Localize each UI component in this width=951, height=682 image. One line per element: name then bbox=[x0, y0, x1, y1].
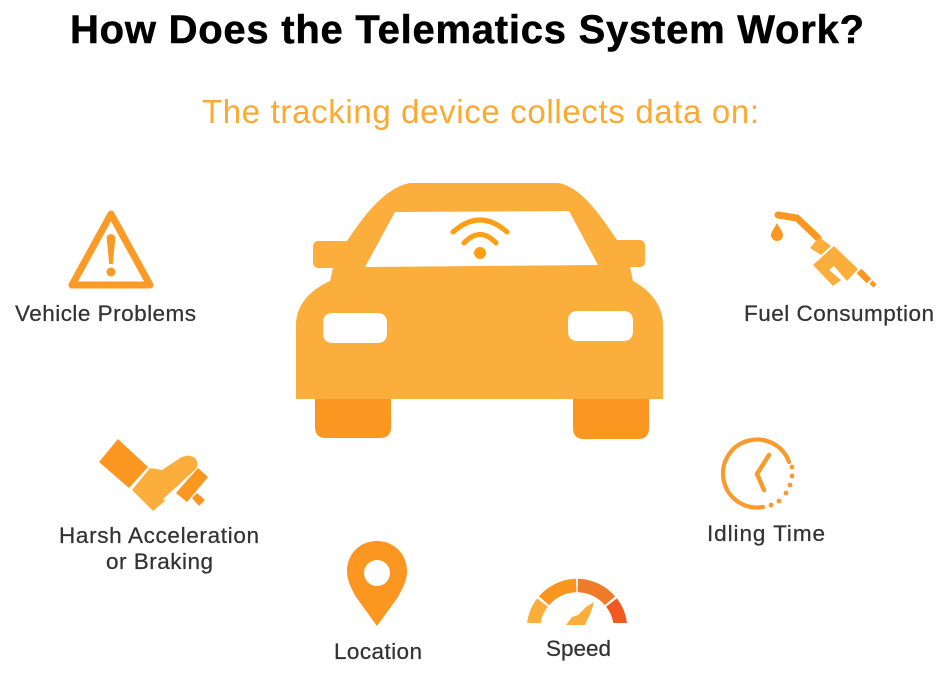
label: harsh acceleration or braking: or Braking bbox=[106, 549, 213, 574]
label: fuel consumption: Fuel Consumption bbox=[744, 301, 934, 326]
icon: foot on pedal bbox=[99, 439, 208, 511]
icon: car with wifi bbox=[296, 183, 663, 439]
label: harsh acceleration or braking: Harsh Acceleration bbox=[59, 523, 259, 548]
wifi symbol bbox=[453, 220, 507, 259]
icon: location pin bbox=[347, 541, 407, 626]
label: speed: Speed bbox=[546, 636, 611, 661]
label: harsh acceleration or braking bbox=[59, 523, 259, 574]
label: vehicle problems: Vehicle Problems bbox=[15, 301, 196, 326]
icon: speedometer bbox=[533, 586, 621, 630]
icon: fuel nozzle bbox=[771, 215, 875, 286]
icon: warning triangle bbox=[72, 214, 150, 285]
icon: clock bbox=[723, 440, 794, 508]
label: location: Location bbox=[334, 639, 422, 664]
car body bbox=[296, 183, 663, 399]
gauge needle bbox=[566, 602, 594, 625]
subtitle: The tracking device collects data on: bbox=[202, 93, 759, 130]
label: idling time: Idling Time bbox=[707, 521, 825, 546]
gauge arc segments bbox=[533, 586, 621, 630]
title: How Does the Telematics System Work? bbox=[70, 8, 864, 52]
car wheels bbox=[315, 395, 649, 439]
